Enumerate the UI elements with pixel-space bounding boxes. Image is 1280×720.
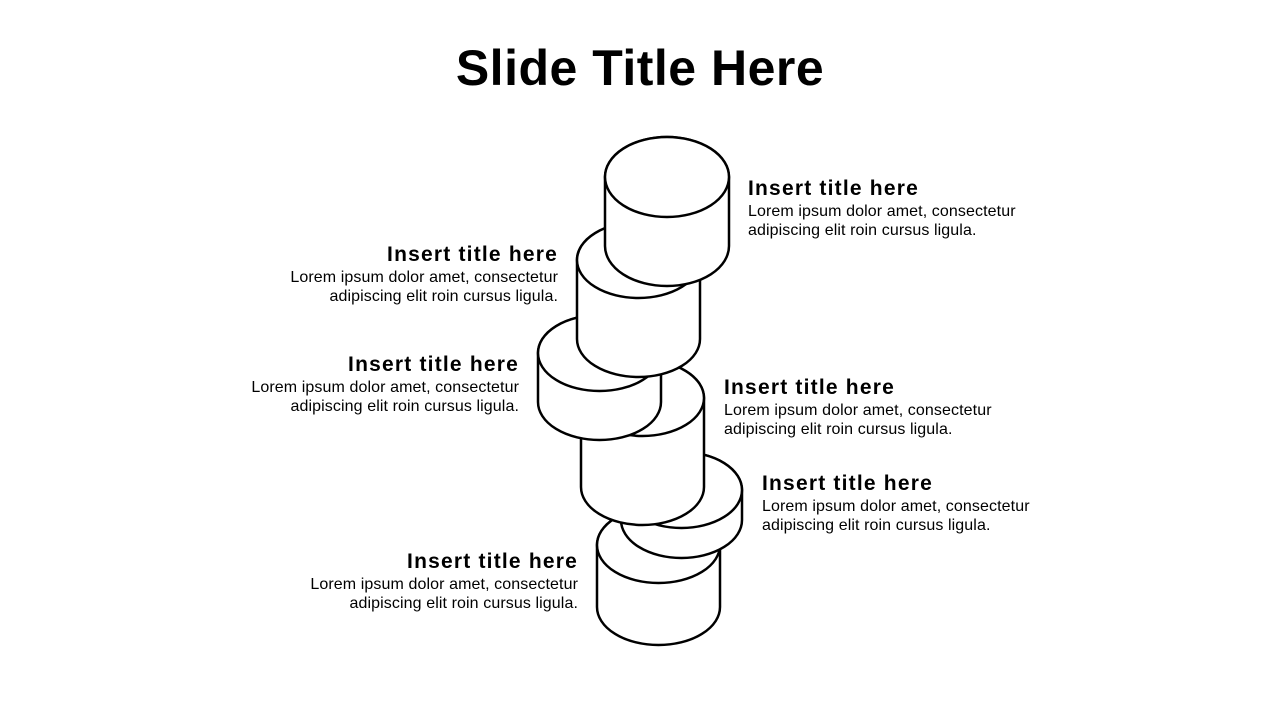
cylinder 4 — [581, 360, 704, 525]
cylinder 1 — [605, 137, 729, 286]
title: Slide Title Here — [456, 40, 824, 96]
text block 3 — [251, 353, 519, 415]
cylinder 2 — [577, 222, 700, 377]
cylinder 3 — [538, 315, 661, 440]
text block 2 — [290, 243, 558, 305]
cylinder 6 — [597, 507, 720, 645]
text block 6 — [310, 550, 578, 612]
text block 1 — [748, 177, 1016, 239]
text block 2: Insert title here — [387, 243, 558, 266]
text block 4: Insert title here — [724, 376, 895, 399]
text block 5: adipiscing elit roin cursus ligula. — [762, 517, 990, 534]
text block 6: adipiscing elit roin cursus ligula. — [350, 595, 578, 612]
text block 5: Lorem ipsum dolor amet, consectetur — [762, 498, 1030, 515]
text block 5: Insert title here — [762, 472, 933, 495]
text block 1: Insert title here — [748, 177, 919, 200]
text block 1: Lorem ipsum dolor amet, consectetur — [748, 203, 1016, 220]
text block 5 — [762, 472, 1030, 534]
text block 4: Lorem ipsum dolor amet, consectetur — [724, 402, 992, 419]
cylinder 5 — [621, 452, 742, 558]
text block 6: Lorem ipsum dolor amet, consectetur — [310, 576, 578, 593]
text block 4: adipiscing elit roin cursus ligula. — [724, 421, 952, 438]
text block 3: adipiscing elit roin cursus ligula. — [290, 398, 519, 415]
text block 2: Lorem ipsum dolor amet, consectetur — [290, 269, 558, 286]
text block 3: Lorem ipsum dolor amet, consectetur — [251, 379, 519, 396]
text block 3: Insert title here — [348, 353, 519, 376]
text block 6: Insert title here — [407, 550, 578, 573]
text block 1: adipiscing elit roin cursus ligula. — [748, 222, 976, 239]
text block 2: adipiscing elit roin cursus ligula. — [330, 288, 558, 305]
text block 4 — [724, 376, 992, 438]
